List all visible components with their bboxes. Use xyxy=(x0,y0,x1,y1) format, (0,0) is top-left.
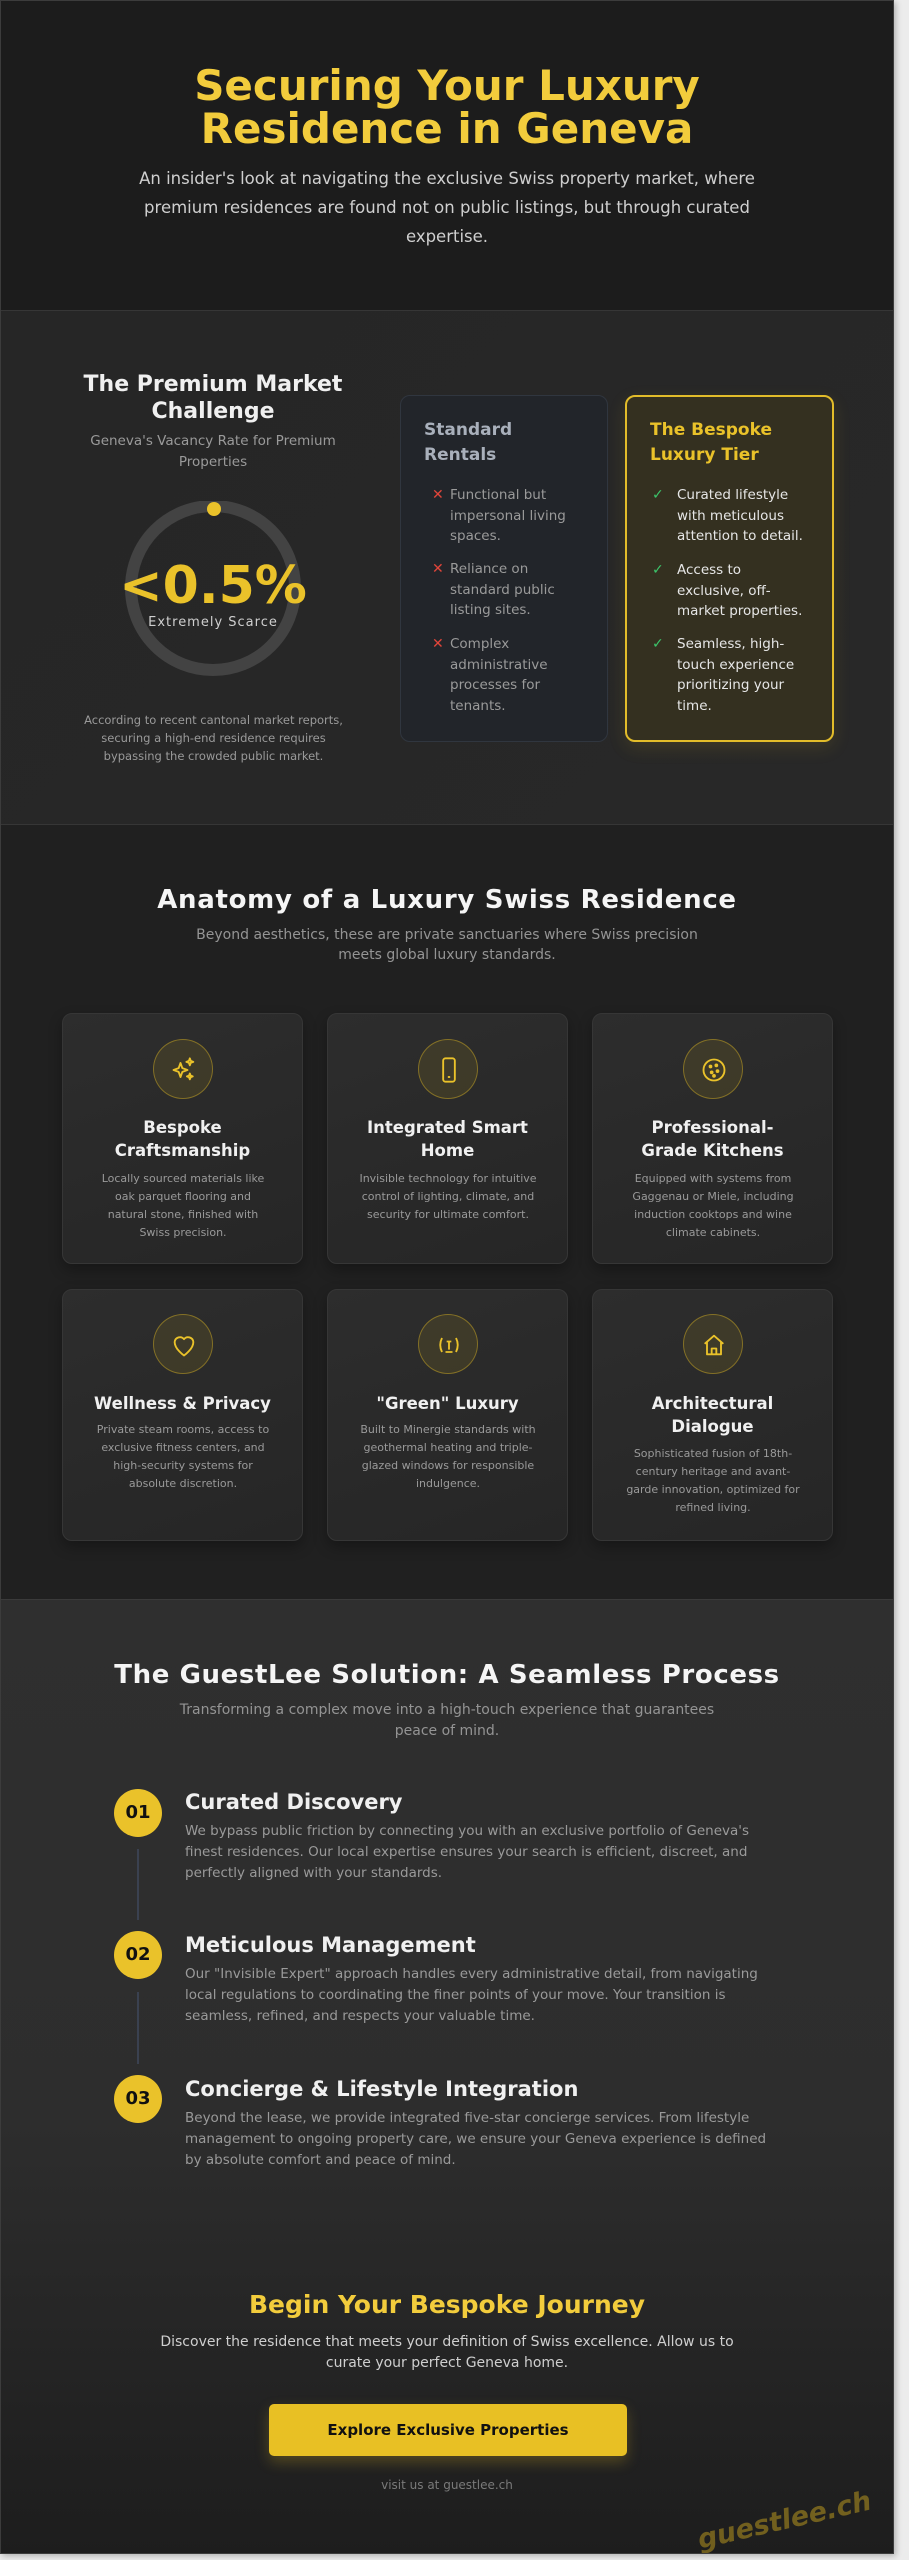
card text: Private steam rooms, access to exclusive fitness centers, and high-security systems for absolute discretion. xyxy=(97,1423,269,1490)
step 3 xyxy=(114,2075,766,2168)
card title xyxy=(367,1118,528,1160)
card title: Architectural xyxy=(652,1394,773,1413)
step 2 xyxy=(114,1931,758,2024)
card title: Dialogue xyxy=(671,1417,754,1436)
card title: Craftsmanship xyxy=(115,1141,250,1160)
card title: Grade Kitchens xyxy=(641,1141,784,1160)
card text: Built to Minergie standards with geothermal heating and triple-glazed windows for responsible indulgence. xyxy=(360,1423,536,1490)
CTA text: Discover the residence that meets your definition of Swiss excellence. Allow us to curate your perfect Geneva home. xyxy=(160,2334,734,2371)
section: solution process xyxy=(1,1599,893,2555)
list items: ✕ xyxy=(432,487,444,503)
CTA button xyxy=(269,2404,627,2456)
card title: Bespoke xyxy=(143,1118,222,1137)
step number: 01 xyxy=(125,1802,151,1823)
ring chart: vacancy rate xyxy=(119,501,307,676)
card title: Professional- xyxy=(652,1118,773,1137)
card: smart home xyxy=(327,1013,568,1264)
list items xyxy=(652,487,803,714)
section subtitle: Beyond aesthetics, these are private sanctuaries where Swiss precision meets global luxury standards. xyxy=(196,927,698,963)
card: kitchens xyxy=(592,1013,833,1264)
card title: Wellness & Privacy xyxy=(94,1394,271,1413)
section: hero xyxy=(1,1,893,310)
list items: Reliance on standard public listing sites. xyxy=(450,561,555,618)
card title: "Green" Luxury xyxy=(376,1394,519,1413)
panel: standard rentals xyxy=(400,395,608,742)
list items: Seamless, high-touch experience prioritizing your time. xyxy=(677,636,794,714)
section: market challenge xyxy=(1,310,893,824)
panel heading: Luxury Tier xyxy=(650,445,759,465)
list items: Curated lifestyle with meticulous attention to detail. xyxy=(677,487,803,544)
card title: Home xyxy=(421,1141,474,1160)
CTA heading: Begin Your Bespoke Journey xyxy=(249,2290,645,2319)
list items: Functional but impersonal living spaces. xyxy=(450,487,566,544)
list items: ✓ xyxy=(652,636,664,652)
card: green luxury xyxy=(327,1289,568,1541)
section subtitle: Transforming a complex move into a high-touch experience that guarantees peace of mind. xyxy=(180,1702,714,1739)
card: architectural dialogue xyxy=(592,1289,833,1541)
list items: Complex administrative processes for tenants. xyxy=(450,636,548,714)
icon: house xyxy=(682,1314,742,1374)
section title: The GuestLee Solution: A Seamless Process xyxy=(114,1660,780,1690)
heading: premium market challenge xyxy=(84,372,342,424)
step text: Beyond the lease, we provide integrated five-star concierge services. From lifestyle management to ongoing property care, we ensure your Geneva experience is defined by absolute comfort and peace of mind. xyxy=(185,2110,766,2168)
step title: Concierge & Lifestyle Integration xyxy=(185,2077,578,2101)
list items: ✕ xyxy=(432,636,444,652)
panel heading: Standard xyxy=(424,420,512,440)
list items: ✓ xyxy=(652,562,664,578)
icon: cookie xyxy=(682,1039,742,1099)
stat label: Extremely Scarce xyxy=(148,615,278,630)
section: anatomy xyxy=(1,824,893,1599)
step title: Curated Discovery xyxy=(185,1790,402,1814)
panel: bespoke luxury tier xyxy=(625,395,834,742)
step 1 xyxy=(114,1789,749,1881)
CTA button: Explore Exclusive Properties xyxy=(327,2421,569,2439)
card title xyxy=(641,1118,784,1160)
heading: premium market challenge: Challenge xyxy=(152,399,274,424)
icon: eco xyxy=(418,1314,478,1374)
card title xyxy=(652,1394,773,1436)
subtitle: An insider's look at navigating the exclusive Swiss property market, where premium residences are found not on public listings, but through curated expertise. xyxy=(139,169,755,246)
panel heading xyxy=(650,420,772,465)
title xyxy=(194,61,700,153)
heading: premium market challenge: The Premium Market xyxy=(84,372,342,397)
list items: Access to exclusive, off-market properties. xyxy=(677,562,802,619)
list items: ✕ xyxy=(432,561,444,577)
icon: phone xyxy=(418,1039,478,1099)
step title: Meticulous Management xyxy=(185,1933,476,1957)
card: wellness xyxy=(62,1289,303,1541)
card title: Integrated Smart xyxy=(367,1118,528,1137)
card text: Locally sourced materials like oak parquet flooring and natural stone, finished with Swiss precision. xyxy=(102,1172,264,1239)
subheading: Geneva's Vacancy Rate for Premium Properties xyxy=(90,433,336,470)
card text: Invisible technology for intuitive control of lighting, climate, and security for ultimate comfort. xyxy=(359,1172,537,1221)
panel heading xyxy=(424,420,512,465)
card text: Equipped with systems from Gaggenau or Miele, including induction cooktops and wine climate cabinets. xyxy=(632,1172,794,1239)
icon: sparkles xyxy=(152,1039,212,1099)
panel heading: Rentals xyxy=(424,445,496,465)
section title: Anatomy of a Luxury Swiss Residence xyxy=(157,885,737,915)
step number xyxy=(114,1789,162,1837)
icon: heart xyxy=(152,1314,212,1374)
panel heading: The Bespoke xyxy=(650,420,772,440)
watermark: guestlee.ch xyxy=(695,2485,874,2554)
caption: According to recent cantonal market reports, securing a high-end residence requires bypassing the crowded public market. xyxy=(84,713,343,763)
step number xyxy=(114,1931,162,1979)
list items xyxy=(432,487,566,714)
step number: 03 xyxy=(125,2088,151,2109)
step text: We bypass public friction by connecting you with an exclusive portfolio of Geneva's finest residences. Our local expertise ensures your search is efficient, discreet, and perfectly aligned with your standards. xyxy=(185,1823,749,1881)
card title xyxy=(115,1118,250,1160)
title: Securing Your Luxury xyxy=(194,61,700,110)
card text: Sophisticated fusion of 18th-century heritage and avant-garde innovation, optimized for refined living. xyxy=(626,1447,800,1514)
step text: Our "Invisible Expert" approach handles every administrative detail, from navigating local regulations to coordinating the finer points of your move. Your transition is seamless, refined, and respects your valuable time. xyxy=(185,1966,758,2024)
step number: 02 xyxy=(125,1944,151,1965)
footer link: visit us at guestlee.ch xyxy=(381,2478,513,2492)
card: bespoke craftsmanship xyxy=(62,1013,303,1264)
stat: <0.5% xyxy=(119,556,307,616)
step number xyxy=(114,2075,162,2123)
title: Residence in Geneva xyxy=(201,104,693,153)
list items: ✓ xyxy=(652,487,664,503)
